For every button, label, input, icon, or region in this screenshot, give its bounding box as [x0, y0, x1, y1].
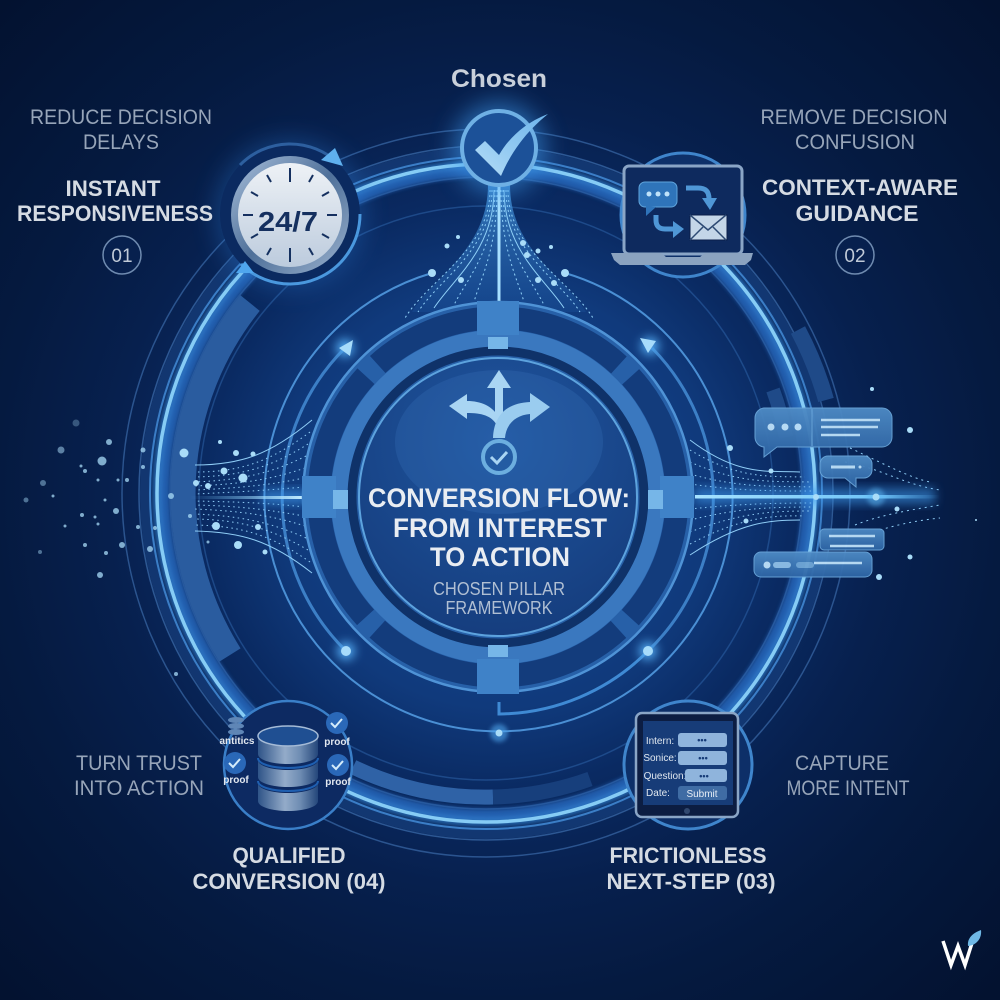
- text block: instant responsiveness: DELAYS: [83, 131, 159, 154]
- small stack: [228, 717, 244, 735]
- text block: capture intent: [786, 752, 910, 800]
- icon: tablet form: •••: [697, 735, 707, 745]
- logo: W mark: [943, 930, 981, 965]
- bubble four: [754, 552, 872, 577]
- text block: frictionless next-step: [606, 843, 776, 894]
- icon: database: proof: [223, 775, 249, 786]
- text block: qualified conversion: CONVERSION (04): [192, 869, 386, 894]
- scattered particles: [24, 235, 977, 742]
- badge 02: [836, 236, 874, 274]
- hub light band: [340, 339, 656, 655]
- icon: tablet form: •••: [699, 771, 709, 781]
- text block: frictionless next-step: FRICTIONLESS: [610, 843, 766, 868]
- hub dark slots: [319, 318, 677, 676]
- icon: decision arrows with check: [449, 370, 550, 473]
- text block: instant responsiveness: REDUCE DECISION: [30, 106, 212, 129]
- text block: context-aware guidance: CONTEXT-AWARE: [762, 175, 958, 200]
- proof checks: [224, 712, 349, 776]
- subtitle: FRAMEWORK: [446, 598, 552, 618]
- icon: database: [219, 701, 352, 829]
- icon: tablet form: Submit: [686, 789, 718, 800]
- icon: tablet form: Date:: [646, 788, 670, 799]
- bubble two: [820, 456, 872, 487]
- right data stream: [690, 440, 940, 555]
- ring arrows and glowing nodes: [336, 337, 659, 660]
- text block: context-aware guidance: REMOVE DECISION: [760, 106, 948, 129]
- icon: chosen check: [453, 102, 548, 194]
- subtitle: [433, 579, 565, 618]
- icon: 24/7 clock: 24/7: [258, 206, 318, 237]
- icon: tablet form: Intern:: [646, 736, 674, 747]
- hub tabs: [302, 301, 694, 694]
- text block: capture intent: CAPTURE: [795, 752, 889, 775]
- icon: laptop: [611, 153, 753, 277]
- chat bubbles: [754, 408, 892, 577]
- icon: database: antitics: [219, 736, 255, 747]
- text block: instant responsiveness: RESPONSIVENESS: [17, 201, 213, 226]
- icon: tablet form: Sonice:: [643, 753, 677, 764]
- text block: context-aware guidance: [760, 106, 958, 226]
- text block: instant responsiveness: INSTANT: [66, 176, 161, 201]
- database cylinder: [258, 726, 318, 811]
- central hub: [302, 301, 694, 694]
- badge 02: 02: [844, 246, 866, 267]
- text block: qualified conversion: [192, 843, 386, 894]
- text block: capture intent: MORE INTENT: [786, 777, 910, 800]
- bubble one: [755, 408, 892, 457]
- icon: tablet form: [624, 701, 752, 829]
- title: FROM INTEREST: [393, 513, 607, 543]
- icon: database: proof: [324, 737, 350, 748]
- outer orbit rings: [122, 129, 850, 857]
- inner orbit rings: [264, 273, 732, 731]
- text block: turn trust: [74, 752, 204, 800]
- bubble three: [820, 529, 884, 550]
- title: CONVERSION FLOW:: [368, 483, 630, 513]
- text block: frictionless next-step: NEXT-STEP (03): [606, 869, 776, 894]
- text block: context-aware guidance: CONFUSION: [795, 131, 915, 154]
- icon: database: proof: [325, 777, 351, 788]
- top data funnel: [405, 185, 593, 318]
- icon: tablet form: •••: [698, 753, 708, 763]
- icon: tablet form: Question:: [644, 771, 686, 782]
- text block: turn trust: TURN TRUST: [76, 752, 202, 775]
- subtitle: CHOSEN PILLAR: [433, 579, 565, 599]
- title: [368, 483, 630, 572]
- horizontal light beam: [190, 488, 940, 504]
- text block: turn trust: INTO ACTION: [74, 777, 204, 800]
- badge 01: 01: [111, 246, 133, 267]
- ring panels: [183, 303, 826, 797]
- icon: 24/7 clock: [214, 138, 366, 290]
- badge 01: [103, 236, 141, 274]
- text block: context-aware guidance: GUIDANCE: [796, 201, 918, 226]
- title: TO ACTION: [430, 542, 570, 572]
- left data stream: [195, 420, 312, 573]
- text block: instant responsiveness: [17, 106, 213, 226]
- text block: qualified conversion: QUALIFIED: [232, 843, 346, 868]
- heading: Chosen: Chosen: [451, 65, 547, 93]
